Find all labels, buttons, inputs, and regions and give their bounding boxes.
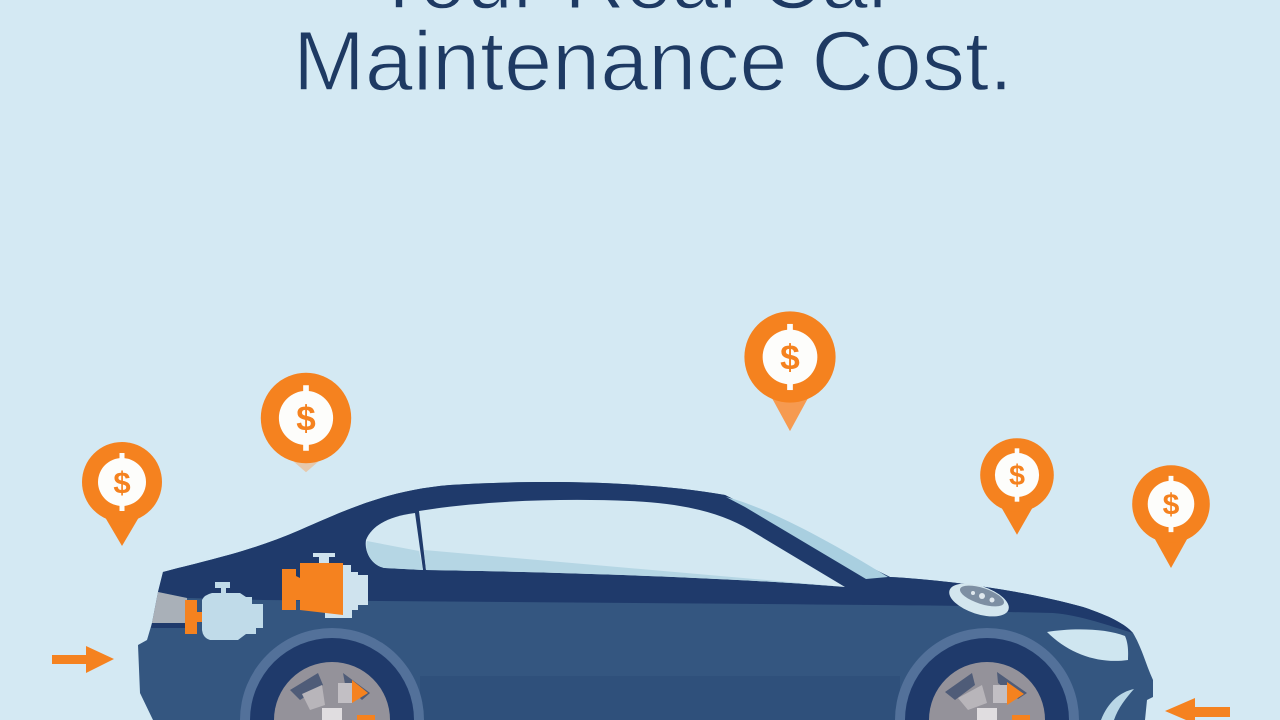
icon: price pin far right	[1132, 465, 1210, 568]
tail light	[152, 592, 187, 623]
icon: price pin rear: $	[296, 399, 316, 438]
rear engine icon	[185, 582, 263, 640]
headlight	[1047, 629, 1128, 661]
icon: price pin centre: $	[780, 339, 800, 378]
hood emblem	[945, 577, 1013, 623]
icon: price pin front	[980, 438, 1054, 535]
main side window	[419, 500, 845, 587]
icon: price pin far right: $	[1163, 489, 1180, 522]
icon: price pin far left	[82, 442, 162, 546]
arrow: rear pointing right	[52, 646, 114, 673]
car body	[138, 482, 1153, 720]
title: Maintenance Cost.	[293, 14, 1013, 108]
rear window lower tint	[366, 541, 423, 570]
front engine icon	[282, 553, 368, 618]
front bumper highlight	[1101, 689, 1134, 720]
rear window	[366, 513, 423, 570]
icon: price pin centre	[744, 311, 836, 431]
arrow: front pointing left	[1165, 698, 1230, 720]
icon: price pin front: $	[1009, 460, 1025, 492]
icon: price pin rear	[261, 373, 351, 472]
main window lower tint	[424, 550, 845, 587]
car illustration	[138, 482, 1153, 720]
icon: price pin far left: $	[113, 465, 131, 500]
lower body shade	[420, 676, 900, 720]
windshield strip	[726, 497, 888, 579]
strip under tail light	[151, 623, 187, 628]
dark upper body	[158, 482, 1133, 633]
front wheel	[895, 628, 1079, 720]
rear wheel	[240, 628, 424, 720]
